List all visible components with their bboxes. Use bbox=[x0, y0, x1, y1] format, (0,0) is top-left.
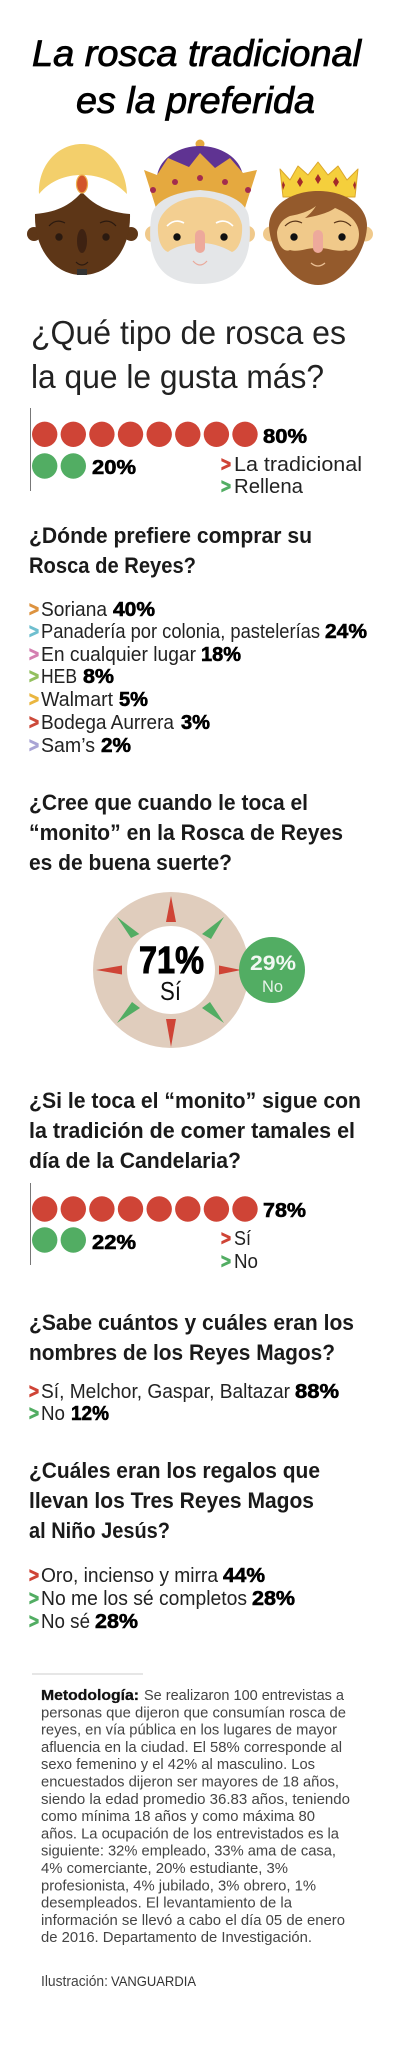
list: regalos: No sé bbox=[41, 1611, 90, 1633]
list: regalos: 44% bbox=[223, 1565, 265, 1587]
legend: tamales: Sí bbox=[234, 1228, 251, 1250]
heading: nombres de los reyes: ¿Sabe cuántos y cuáles eran los bbox=[29, 1310, 354, 1335]
heading: buena suerte: “monito” en la Rosca de Reyes bbox=[29, 820, 343, 845]
chart: donut 71%: Sí bbox=[160, 976, 182, 1006]
credit bbox=[41, 1973, 197, 1990]
heading: tamales bbox=[29, 1088, 361, 1173]
list: dónde comprar: 5% bbox=[119, 689, 148, 711]
heading: nombres de los reyes bbox=[29, 1310, 354, 1365]
list: dónde comprar: > bbox=[29, 666, 39, 688]
list: nombres de los reyes: 88% bbox=[295, 1381, 339, 1403]
legend: tipo de rosca: > bbox=[221, 454, 231, 476]
heading: tamales: ¿Si le toca el “monito” sigue con bbox=[29, 1088, 361, 1113]
text block: metodología: reyes, en vía pública en los lugares de mayor bbox=[41, 1722, 337, 1739]
legend: tamales: > bbox=[221, 1251, 231, 1273]
list: dónde comprar bbox=[29, 599, 367, 757]
title: La rosca tradicional bbox=[32, 33, 363, 74]
legend: tamales: > bbox=[221, 1228, 231, 1250]
list: nombres de los reyes: No bbox=[41, 1403, 65, 1425]
text block: metodología: años. La ocupación de los entrevistados es la bbox=[41, 1825, 340, 1842]
text block: metodología: información se llevó a cabo el día 05 de enero bbox=[41, 1912, 345, 1929]
icon: king with turban bbox=[27, 144, 138, 275]
list: dónde comprar: HEB bbox=[41, 666, 77, 688]
text block: metodología: encuestados dijeron ser mayores de 18 años, bbox=[41, 1774, 339, 1790]
text block: metodología: desempleados. El levantamiento de la bbox=[41, 1895, 293, 1912]
list: dónde comprar: > bbox=[29, 599, 39, 621]
chart: donut 71%: 71% bbox=[139, 940, 204, 982]
legend: tamales: No bbox=[234, 1251, 258, 1273]
list: dónde comprar: Walmart bbox=[41, 689, 113, 711]
list: nombres de los reyes: 12% bbox=[71, 1403, 109, 1425]
heading: regalos bbox=[29, 1458, 320, 1543]
credit: VANGUARDIA bbox=[111, 1973, 197, 1989]
list: regalos bbox=[29, 1565, 295, 1633]
heading: buena suerte: es de buena suerte? bbox=[29, 850, 232, 875]
chart: tamales dots: 78% bbox=[263, 1200, 306, 1222]
list: dónde comprar: > bbox=[29, 689, 39, 711]
heading: buena suerte: ¿Cree que cuando le toca el bbox=[29, 790, 308, 815]
list: dónde comprar: > bbox=[29, 712, 39, 734]
text block: metodología: de 2016. Departamento de Investigación. bbox=[41, 1929, 312, 1946]
title bbox=[32, 33, 363, 121]
list: dónde comprar: 3% bbox=[181, 712, 210, 734]
text block: metodología: sexo femenino y el 42% al masculino. Los bbox=[41, 1756, 315, 1773]
chart: tipo de rosca dots bbox=[30, 408, 307, 491]
text block: metodología: siguiente: 32% empleado, 33% ama de casa, bbox=[41, 1843, 336, 1860]
text block: metodología: profesionista, 4% jubilado, 3% obrero, 1% bbox=[41, 1877, 316, 1894]
heading: tipo de rosca: la que le gusta más? bbox=[31, 358, 324, 395]
chart: tamales dots: 22% bbox=[92, 1232, 136, 1254]
chart: tipo de rosca dots: 20% bbox=[92, 457, 136, 479]
chart: donut 71% bbox=[96, 896, 241, 1047]
list: regalos: > bbox=[29, 1611, 39, 1633]
callout: 29% no: 29% bbox=[250, 952, 296, 975]
heading: tipo de rosca: ¿Qué tipo de rosca es bbox=[31, 314, 346, 351]
heading: tamales: día de la Candelaria? bbox=[29, 1148, 241, 1173]
list: dónde comprar: 24% bbox=[325, 621, 367, 643]
list: dónde comprar: En cualquier lugar bbox=[41, 644, 196, 666]
list: regalos: Oro, incienso y mirra bbox=[41, 1565, 219, 1587]
list: dónde comprar: Bodega Aurrera bbox=[41, 712, 175, 734]
icon: king with gold crown bbox=[263, 162, 373, 285]
legend: tipo de rosca: > bbox=[221, 476, 231, 498]
text block: metodología: Se realizaron 100 entrevistas a bbox=[144, 1687, 345, 1704]
list: dónde comprar: Panadería por colonia, pastelerías bbox=[41, 621, 320, 643]
chart: tipo de rosca dots: 80% bbox=[263, 426, 307, 448]
heading: buena suerte bbox=[29, 790, 343, 875]
list: nombres de los reyes: > bbox=[29, 1381, 39, 1403]
text block: metodología: como mínima 18 años y como máxima 80 bbox=[41, 1808, 315, 1825]
list: dónde comprar: > bbox=[29, 621, 39, 643]
list: regalos: 28% bbox=[252, 1588, 295, 1610]
text block: metodología: 4% comerciante, 20% estudiante, 3% bbox=[41, 1860, 288, 1877]
list: nombres de los reyes bbox=[29, 1381, 339, 1425]
legend: tamales bbox=[221, 1228, 258, 1273]
list: dónde comprar: 8% bbox=[83, 666, 114, 688]
list: dónde comprar: Soriana bbox=[41, 599, 108, 621]
list: regalos: No me los sé completos bbox=[41, 1588, 247, 1610]
legend: tipo de rosca: Rellena bbox=[234, 476, 304, 498]
heading: nombres de los reyes: nombres de los Reyes Magos? bbox=[29, 1340, 335, 1365]
text block: metodología bbox=[41, 1687, 350, 1946]
text block: metodología: personas que dijeron que consumían rosca de bbox=[41, 1704, 346, 1721]
heading: dónde comprar bbox=[29, 523, 312, 578]
heading: tamales: la tradición de comer tamales el bbox=[29, 1118, 355, 1143]
list: regalos: > bbox=[29, 1588, 39, 1610]
heading: regalos: ¿Cuáles eran los regalos que bbox=[29, 1458, 320, 1483]
list: dónde comprar: > bbox=[29, 735, 39, 757]
callout: 29% no bbox=[239, 937, 305, 1003]
credit: Ilustración: bbox=[41, 1973, 108, 1990]
list: dónde comprar: 40% bbox=[113, 599, 155, 621]
heading: dónde comprar: Rosca de Reyes? bbox=[29, 553, 196, 578]
legend: tipo de rosca bbox=[221, 454, 362, 498]
text block: metodología: afluencia en la ciudad. El 58% corresponde al bbox=[41, 1739, 342, 1756]
list: nombres de los reyes: > bbox=[29, 1403, 39, 1425]
heading: tipo de rosca bbox=[31, 314, 346, 395]
list: dónde comprar: 18% bbox=[201, 644, 241, 666]
list: dónde comprar: 2% bbox=[101, 735, 131, 757]
title: es la preferida bbox=[76, 80, 315, 121]
heading: regalos: llevan los Tres Reyes Magos bbox=[29, 1488, 314, 1513]
list: regalos: > bbox=[29, 1565, 39, 1587]
list: dónde comprar: > bbox=[29, 644, 39, 666]
text block: metodología: siendo la edad promedio 36.83 años, teniendo bbox=[41, 1791, 350, 1808]
chart: tamales dots bbox=[30, 1183, 306, 1265]
heading: dónde comprar: ¿Dónde prefiere comprar su bbox=[29, 523, 312, 548]
list: regalos: 28% bbox=[95, 1611, 138, 1633]
text block: metodología: Metodología: bbox=[41, 1687, 139, 1704]
list: nombres de los reyes: Sí, Melchor, Gaspar, Baltazar bbox=[41, 1381, 290, 1403]
callout: 29% no: No bbox=[262, 977, 283, 996]
icon: king with purple crown bbox=[144, 140, 257, 284]
list: dónde comprar: Sam’s bbox=[41, 735, 95, 757]
illustration: three kings bbox=[27, 140, 373, 285]
heading: regalos: al Niño Jesús? bbox=[29, 1518, 170, 1543]
legend: tipo de rosca: La tradicional bbox=[234, 454, 362, 476]
